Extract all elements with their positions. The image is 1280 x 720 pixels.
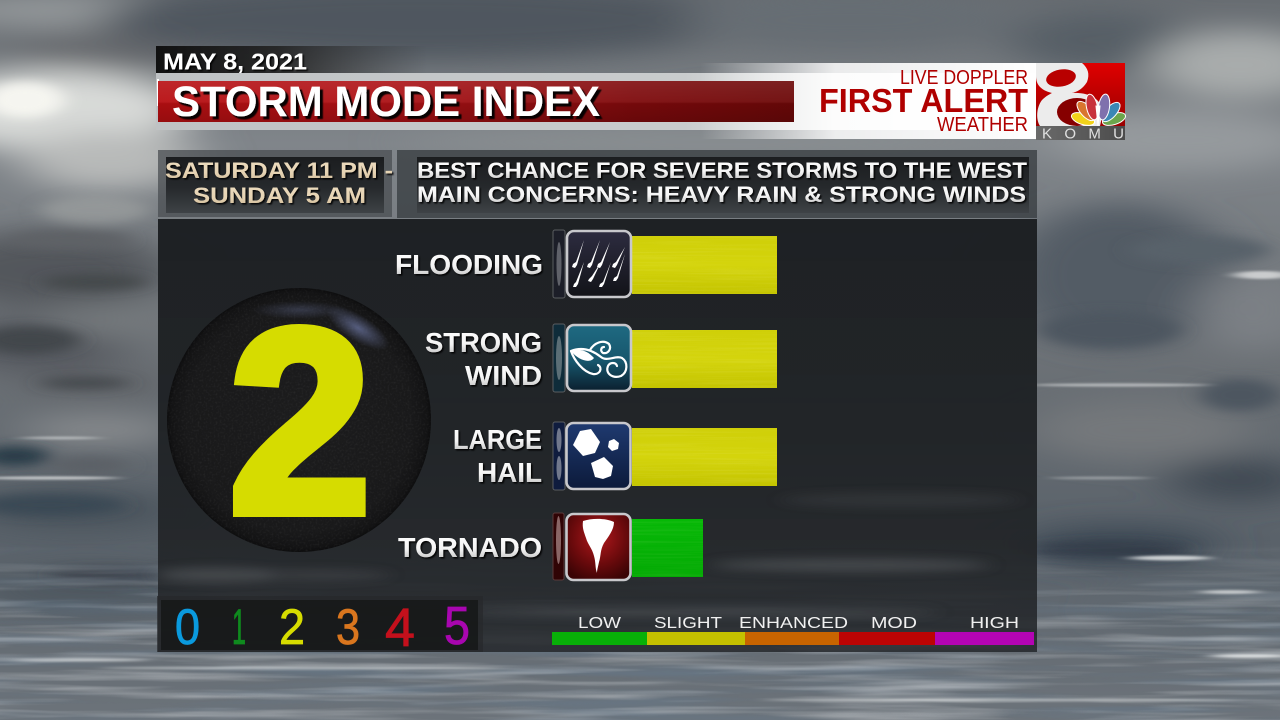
legend: risk levels [552,615,1034,645]
label: large hail: HAIL [477,457,542,488]
first alert weather brand: LIVE DOPPLER [900,67,1028,89]
icon: flooding [553,230,631,298]
scale: index values: 0 [175,599,200,655]
first alert weather brand: FIRST ALERT [819,82,1028,119]
label: strong wind [425,327,542,391]
first alert weather brand: WEATHER [937,114,1028,136]
label: tornado: TORNADO [398,532,542,563]
scale: index values: 2 [279,599,305,655]
bar: large hail [632,428,777,486]
row: strong wind [425,324,777,392]
row: flooding [395,230,777,298]
panel: time window: SUNDAY 5 AM [193,183,366,208]
legend: risk levels: ENHANCED [739,615,848,632]
label: strong wind: STRONG [425,327,542,358]
date tab: MAY 8, 2021 [163,48,307,74]
red title bar [158,78,794,126]
legend: risk levels: MOD [871,615,917,632]
lower cloud streaks [0,561,1280,720]
label: flooding: FLOODING [395,249,543,280]
legend: risk levels: SLIGHT [654,615,722,632]
scale: index values: 4 [385,598,415,658]
bar: flooding [632,236,777,294]
row: tornado [398,513,703,580]
first alert weather brand [819,67,1028,136]
KOMU station logo [1036,63,1127,142]
red title bar: STORM MODE INDEX [172,78,600,126]
panel: time window [158,150,393,217]
label: large hail [453,424,542,488]
index ball [167,275,431,568]
KOMU station logo: KOMU [1042,126,1124,142]
peacock [1070,93,1127,128]
index value: 2 [229,275,371,568]
panel: time window: SATURDAY 11 PM - [165,158,393,183]
scale: index values: 5 [444,596,470,656]
panel: headline: MAIN CONCERNS: HEAVY RAIN & STRONG WINDS [417,182,1026,207]
icon: wind [553,324,631,392]
bar: tornado [632,519,703,577]
legend: risk levels: HIGH [970,615,1019,632]
scale: index values: 3 [336,599,360,655]
numeral 8 [1036,63,1103,126]
panel: headline: BEST CHANCE FOR SEVERE STORMS TO THE WEST [417,158,1028,183]
icon: tornado [553,513,630,580]
bar: strong wind [632,330,777,388]
label: strong wind: WIND [465,360,542,391]
scale: index values [157,596,483,658]
panel: headline [397,150,1037,218]
panel: main index [155,219,1037,658]
label: large hail: LARGE [453,424,542,455]
date tab [156,46,426,77]
legend: risk levels: LOW [578,615,622,632]
scale: index values: 1 [232,599,246,655]
icon: hail [553,422,630,490]
row: large hail [453,422,777,490]
header banner [156,63,1037,139]
